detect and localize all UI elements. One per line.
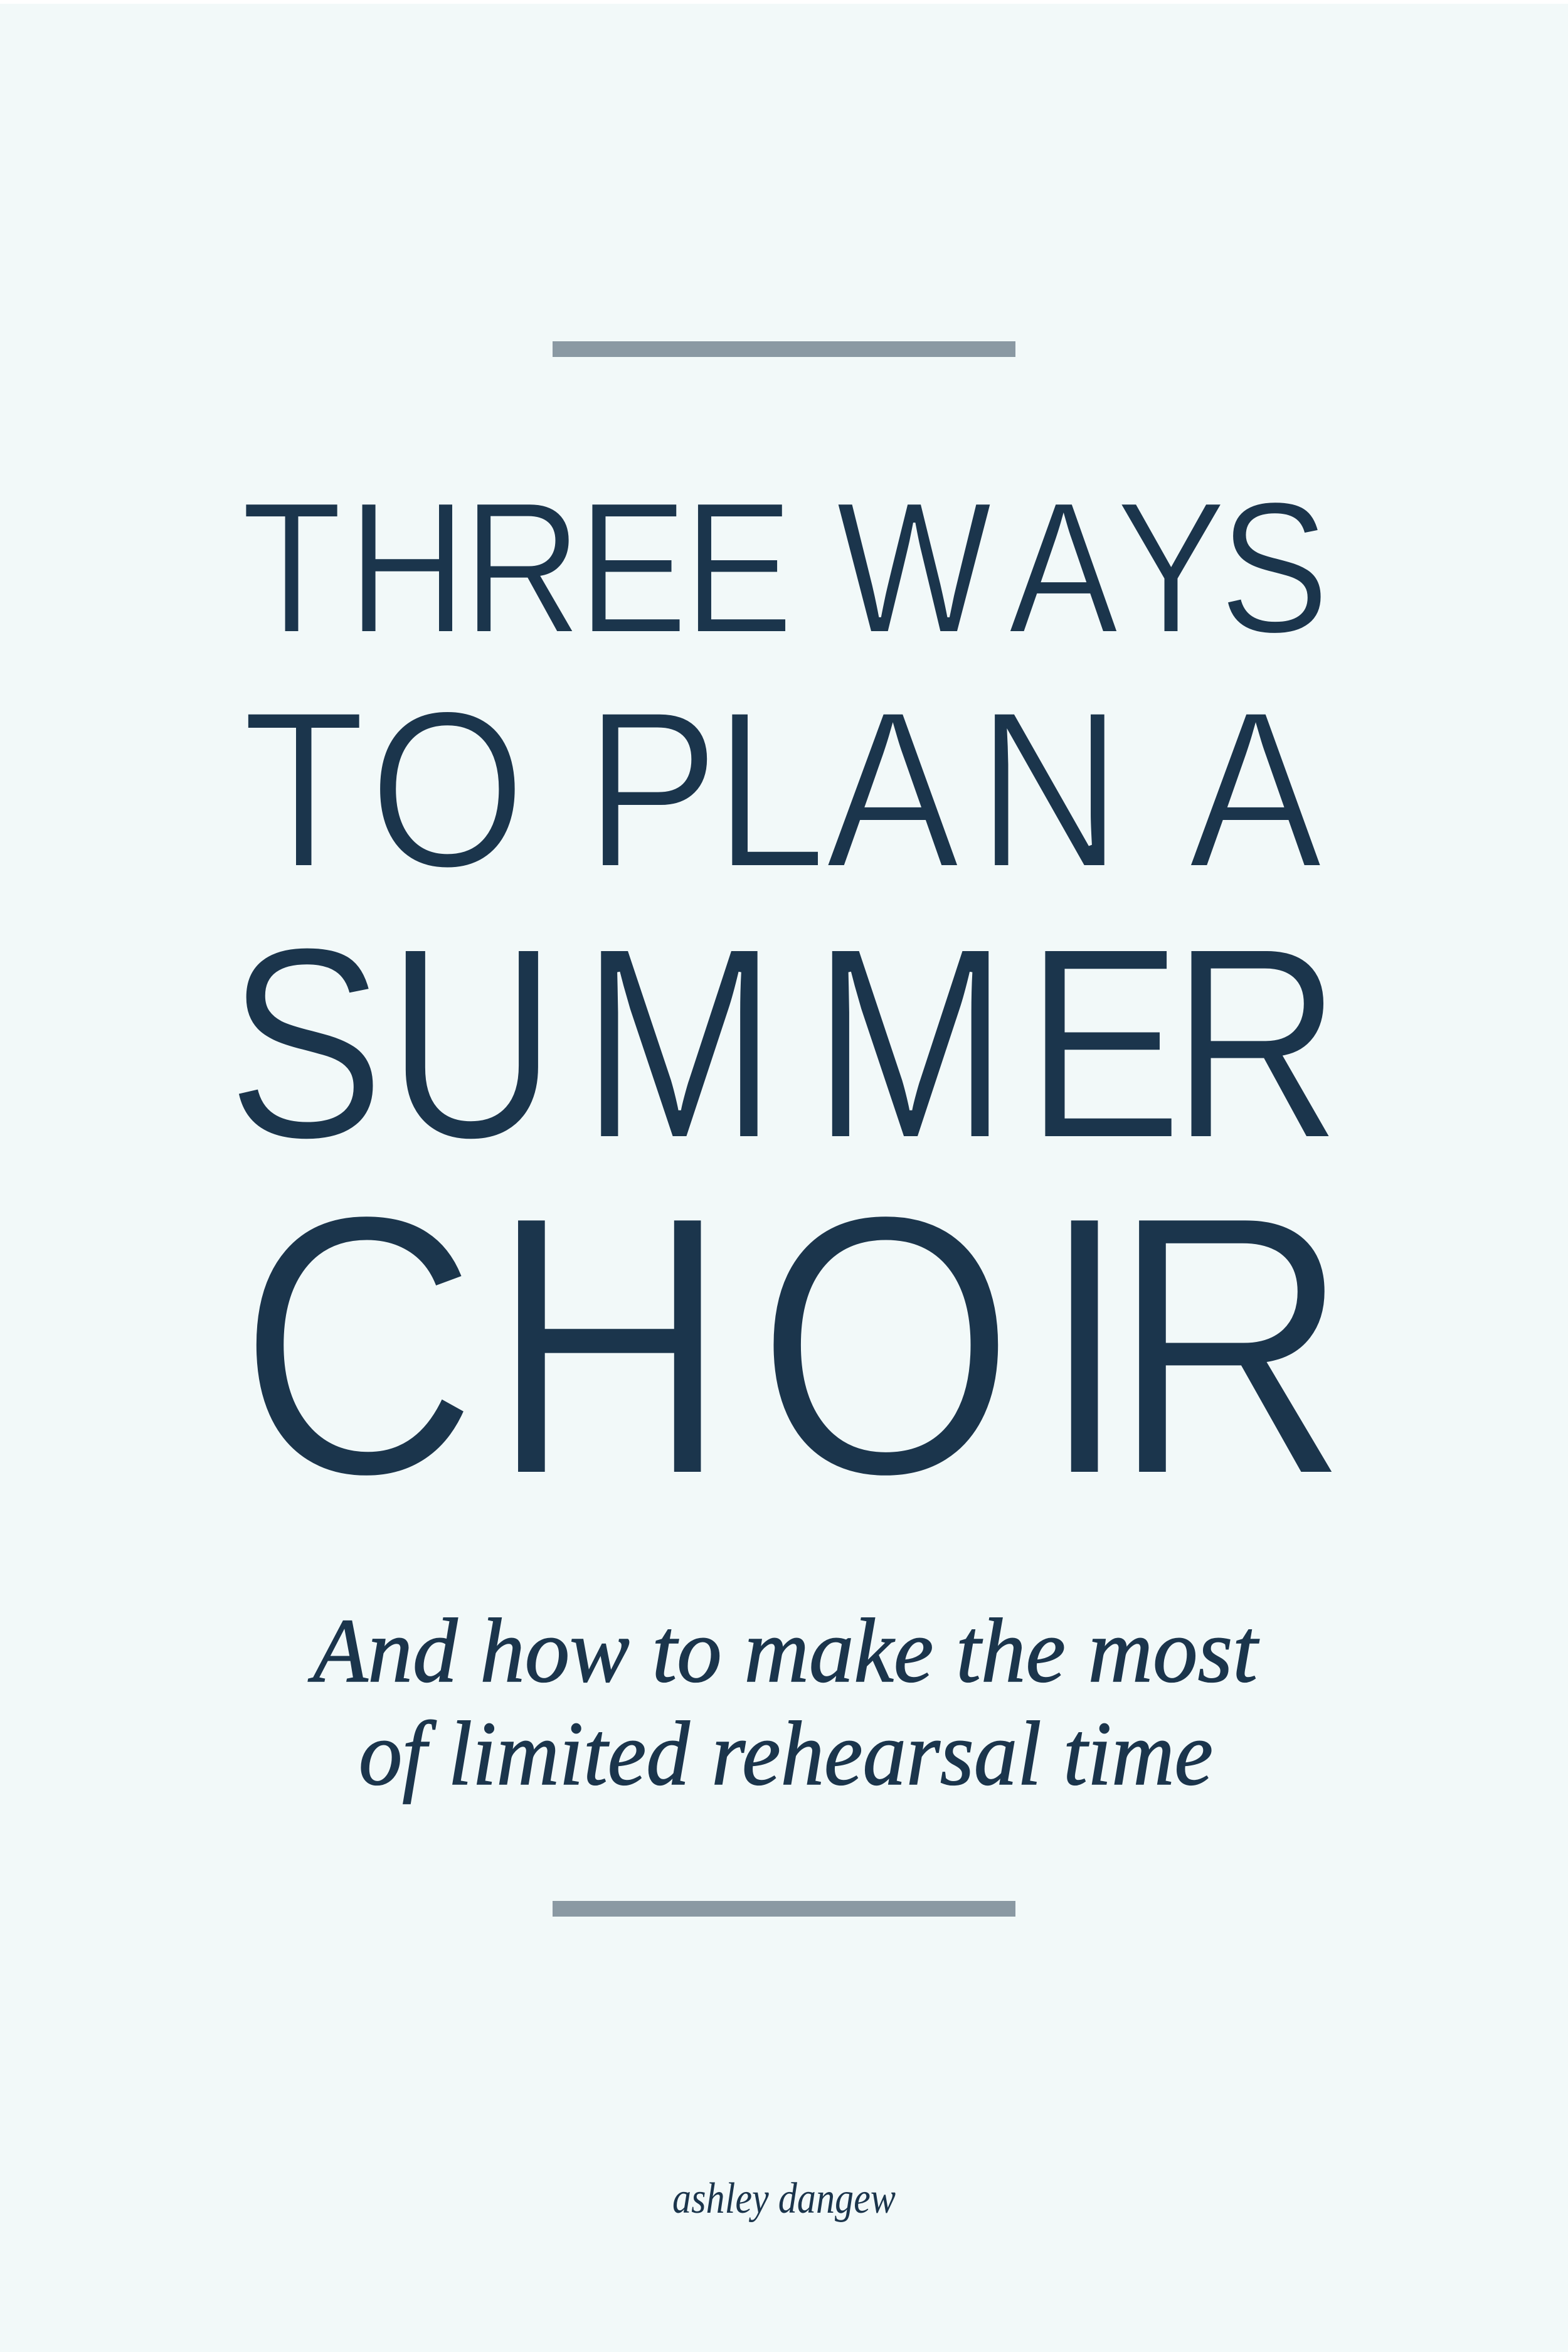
subtitle line 1: And how to make the most — [308, 1600, 1259, 1701]
title line: SUMMER: SUMMER — [226, 890, 1342, 1196]
title line: THREE WAYS: THREE WAYS — [241, 462, 1329, 673]
title — [226, 462, 1352, 1553]
subtitle line 2: of limited rehearsal time — [359, 1703, 1213, 1804]
subtitle — [308, 1600, 1259, 1804]
top divider bar — [553, 341, 1015, 357]
signature: ashley dangew — [672, 2174, 896, 2223]
title line: TO PLAN A: TO PLAN A — [242, 664, 1324, 915]
bottom divider bar — [553, 1901, 1015, 1917]
title line: CHOIR: CHOIR — [237, 1137, 1352, 1553]
